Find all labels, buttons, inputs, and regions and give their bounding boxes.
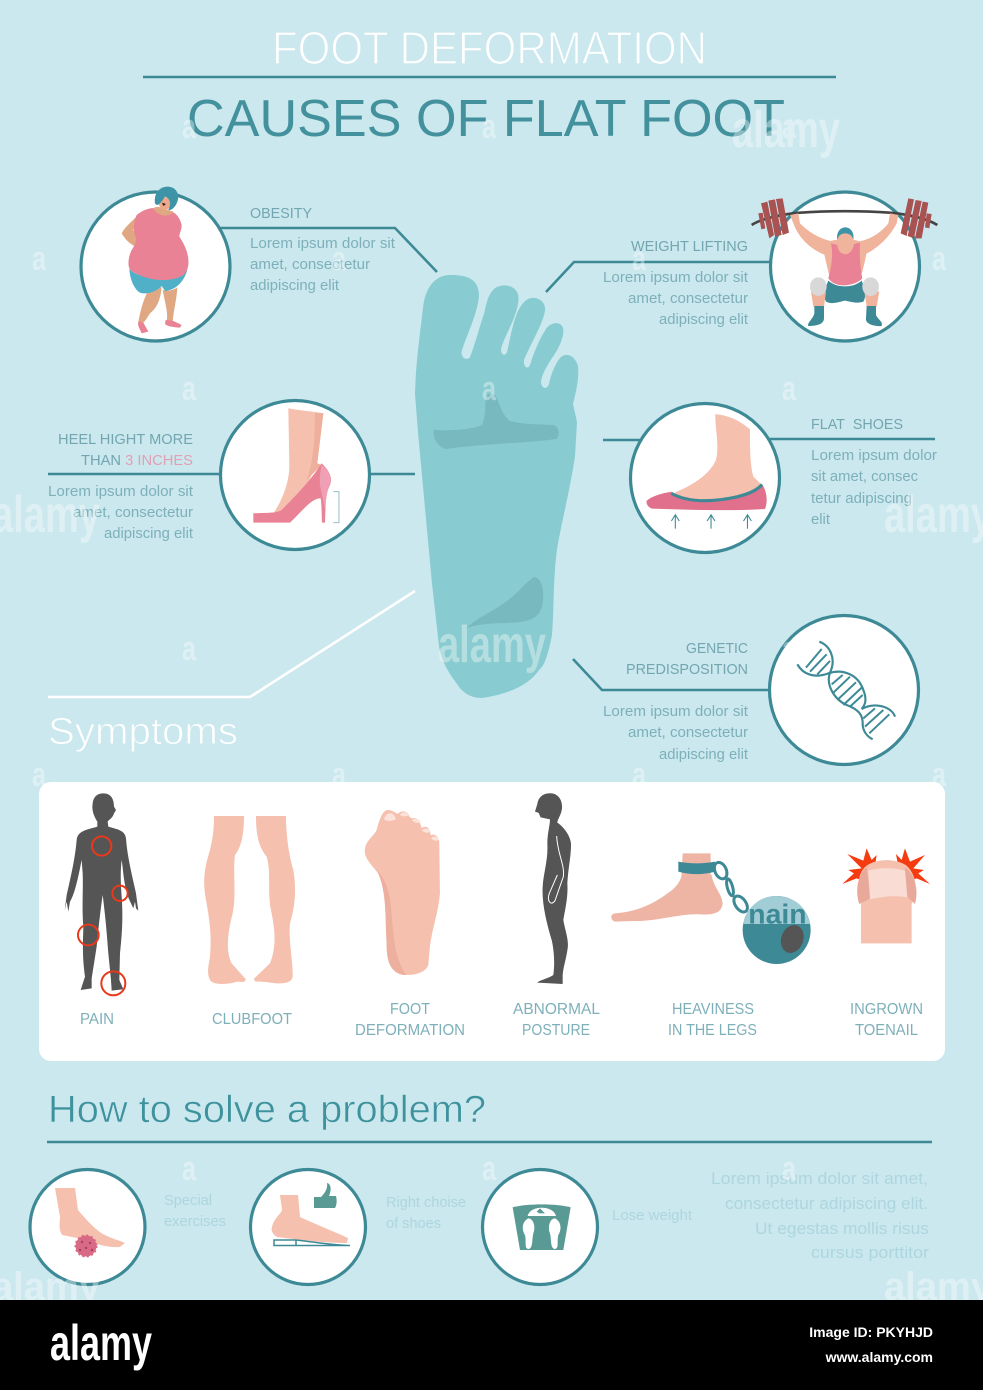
circle: flat shoe illustration [630,404,780,552]
watermark pattern: a [182,630,197,668]
text: genetic predisposition: adipiscing elit [659,746,749,763]
text: heel height: amet, consectetur [73,504,193,521]
watermark pattern: a [332,240,347,278]
heading: symptoms: Symptoms [48,711,238,753]
text: weight lifting: Lorem ipsum dolor sit [603,269,749,286]
symptom: abnormal posture: POSTURE [522,1022,590,1039]
watermark pattern: a [932,756,947,794]
central foot illustration [415,275,578,698]
circle: high heel illustration [220,400,370,550]
watermark pattern: alamy [732,101,840,159]
text: obesity: Lorem ipsum dolor sit [250,235,396,252]
solution: right choice of shoes: Right choise [386,1194,466,1211]
solution: lose weight [482,1170,693,1284]
symptom: foot deformation [355,810,465,1039]
symptom: heaviness in the legs: IN THE LEGS [668,1022,757,1039]
circle: obesity illustration [81,187,230,341]
watermark pattern: a [482,108,497,146]
symptom: clubfoot: CLUBFOOT [212,1011,292,1028]
text: weight lifting: amet, consectetur [628,290,748,307]
connector: flat shoes [603,439,935,440]
watermark pattern: a [32,756,47,794]
forefoot pad shading [434,394,559,449]
symptom: heaviness in the legs: nain [748,898,807,929]
watermark pattern: a [182,370,197,408]
symptom: foot deformation: FOOT [390,1001,430,1018]
symptom: ingrown toenail: INGROWN [850,1001,923,1018]
connector: genetic predisposition [573,659,772,690]
text: flat shoes: FLAT SHOES [811,416,903,433]
solution: special exercises [30,1170,226,1284]
footer bar: alamy [50,1315,152,1371]
symptom: clubfoot [204,816,295,1028]
watermark pattern: a [782,108,797,146]
symptom: abnormal posture [513,793,600,1039]
title block [143,22,836,148]
text: heel height: THAN 3 INCHES [81,452,193,469]
text: heel height: Lorem ipsum dolor sit [48,483,194,500]
watermark pattern: a [632,756,647,794]
circle: weight lifting illustration [752,192,937,341]
watermark pattern: a [482,1150,497,1188]
text: genetic predisposition [603,640,749,763]
icon: DNA helix [797,642,895,739]
text: genetic predisposition: amet, consectetur [628,724,748,741]
footer bar [0,1300,983,1390]
panel: symptoms [39,782,945,1061]
watermark pattern: a [632,240,647,278]
text: obesity: amet, consectetur [250,256,370,273]
watermark pattern: a [182,1150,197,1188]
text: flat shoes: Lorem ipsum dolor [811,447,937,464]
text: genetic predisposition: GENETIC [686,640,748,657]
connector: heel height [48,473,415,475]
text: weight lifting [603,238,749,328]
watermark pattern: a [332,756,347,794]
watermark pattern: a [782,630,797,668]
solution: lose weight: Lose weight [612,1207,693,1224]
watermark pattern: alamy [438,616,546,674]
solution: special exercises: Special [164,1192,212,1209]
circle: DNA illustration [770,616,918,764]
connector: symptoms [48,591,415,697]
symptom: pain [65,793,138,1028]
footer bar: www.alamy.com [825,1349,933,1365]
text: heel height [48,431,194,542]
text: flat shoes: tetur adipiscing [811,490,912,507]
icon: thumbs up [314,1183,337,1208]
title block: FOOT DEFORMATION [272,22,707,74]
text: flat shoes: sit amet, consec [811,468,918,485]
text: flat shoes: elit [811,511,831,528]
text: weight lifting: WEIGHT LIFTING [631,238,748,255]
title block: CAUSES OF FLAT FOOT [187,90,785,148]
text: heel height: HEEL HIGHT MORE [58,431,193,448]
text block: closing paragraph: Ut egestas mollis risus [755,1219,929,1238]
text block: closing paragraph: Lorem ipsum dolor sit amet, [711,1169,928,1188]
solution: right choice of shoes: of shoes [386,1215,441,1232]
watermark pattern: a [782,370,797,408]
watermark pattern: a [182,108,197,146]
text block: closing paragraph: consectetur adipiscing elit. [725,1194,928,1213]
solution: special exercises: exercises [164,1213,226,1230]
text: heel height: adipiscing elit [104,525,194,542]
connector: weight lifting [546,262,772,292]
heel pad shading [466,577,543,628]
text: obesity: adipiscing elit [250,277,340,294]
text: genetic predisposition: PREDISPOSITION [626,661,748,678]
text: genetic predisposition: Lorem ipsum dolor sit [603,703,749,720]
watermark pattern: a [932,240,947,278]
text block: closing paragraph: cursus porttitor [811,1243,929,1262]
symptom: ingrown toenail [842,848,930,1039]
symptom: abnormal posture: ABNORMAL [513,1001,600,1018]
watermark pattern: a [482,370,497,408]
heading: how to solve a problem: How to solve a problem? [48,1089,486,1131]
solution: right choice of shoes [250,1170,466,1284]
symptom: foot deformation: DEFORMATION [355,1022,465,1039]
symptom: heaviness in the legs: HEAVINESS [672,1001,754,1018]
connector: obesity [220,228,437,272]
footer bar: Image ID: PKYHJD [809,1324,933,1340]
symptom: ingrown toenail: TOENAIL [855,1022,918,1039]
text: weight lifting: adipiscing elit [659,311,749,328]
icon: bathroom scale [513,1204,571,1250]
symptom: heaviness in the legs [611,853,811,1039]
watermark pattern: a [782,1150,797,1188]
text: obesity: OBESITY [250,205,312,222]
text block: closing paragraph [711,1169,929,1262]
watermark pattern: a [32,240,47,278]
text: obesity [250,205,396,294]
symptom: pain: PAIN [80,1011,114,1028]
text: flat shoes [811,416,937,528]
